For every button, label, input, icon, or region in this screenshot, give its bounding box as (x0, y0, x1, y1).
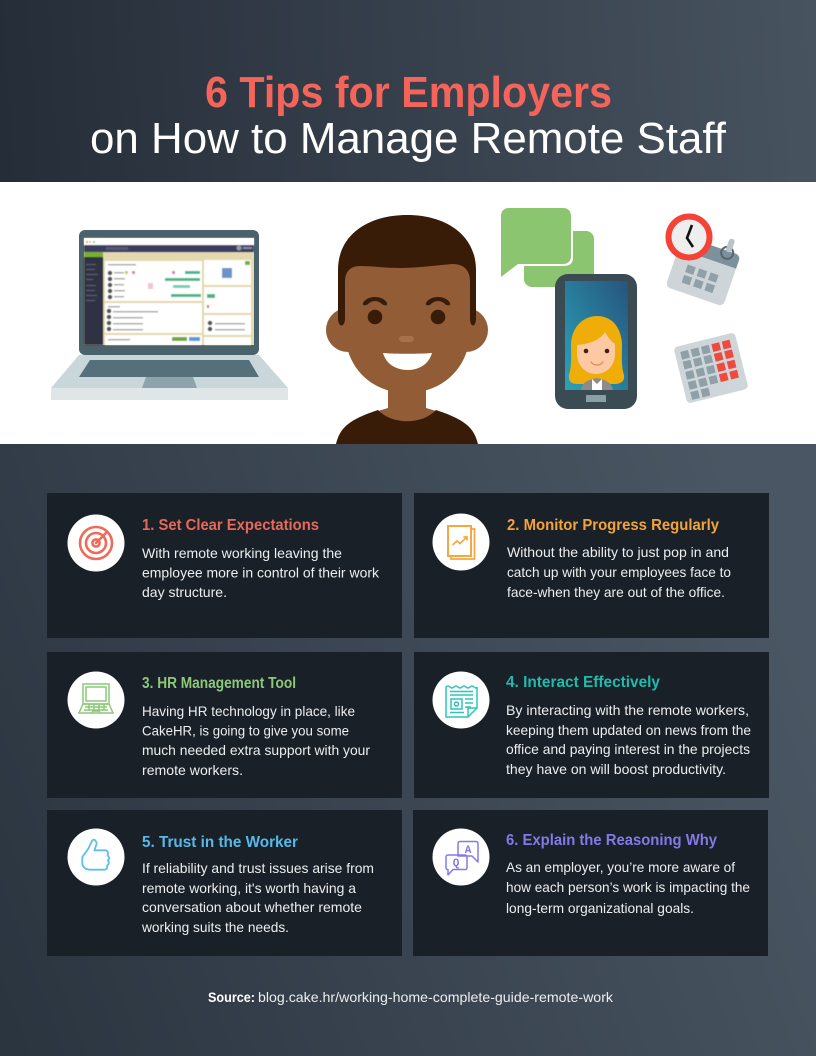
icon: question and answer bubbles: A (465, 845, 472, 857)
icon: calendar with clock (665, 216, 745, 306)
icon: thumbs up (68, 828, 124, 886)
icon: laptop outline (68, 672, 124, 728)
text: tip 4 body: office and paying interest in the projects (506, 741, 750, 757)
icon: newspaper (432, 672, 490, 728)
text: tip 5 body: working suits the needs. (141, 919, 289, 935)
source line: blog.cake.hr/working-home-complete-guide-remote-work (258, 989, 614, 1005)
text: tip 4 body: By interacting with the remote workers, (506, 702, 749, 718)
panel: tip 1 (47, 493, 402, 638)
text: tip 5 body (141, 860, 374, 935)
heading: tip 5: 5. Trust in the Worker (142, 834, 298, 851)
text: tip 5 body: If reliability and trust issues arise from (142, 860, 374, 876)
text: tip 2 body: Without the ability to just pop in and (507, 544, 729, 560)
icon: progress report (432, 514, 490, 570)
heading: tip 4: 4. Interact Effectively (506, 674, 660, 691)
text: tip 5 body: conversation about whether remote (142, 899, 362, 915)
text: tip 3 body: much needed extra support with your (142, 742, 370, 758)
icon: chat bubbles (499, 206, 594, 287)
text: tip 5 body: remote working, it's worth having a (142, 880, 356, 896)
text: tip 1 body: With remote working leaving the (142, 545, 342, 561)
panel: tip 4 (414, 652, 769, 798)
text: tip 2 body (507, 544, 731, 600)
text: tip 6 body: long-term organizational goals. (506, 900, 694, 916)
panel: tip 6 (413, 810, 768, 956)
icon: monthly calendar (673, 332, 749, 404)
title (90, 68, 727, 163)
heading: tip 1: 1. Set Clear Expectations (142, 517, 319, 534)
icon: question and answer bubbles: Q (453, 858, 460, 870)
icon: phone with video call (555, 274, 637, 409)
heading: tip 2: 2. Monitor Progress Regularly (507, 517, 719, 534)
heading: tip 6: 6. Explain the Reasoning Why (506, 832, 717, 849)
heading: tip 3: 3. HR Management Tool (142, 675, 296, 692)
text: tip 6 body: how each person’s work is impacting the (506, 879, 750, 895)
text: tip 1 body: employee more in control of their work (142, 564, 380, 580)
text: tip 3 body: remote workers. (142, 762, 243, 778)
icon: smiling man (326, 215, 488, 444)
illustration band (0, 182, 816, 444)
source line: Source: (208, 989, 255, 1005)
text: tip 1 body (142, 545, 380, 600)
icon: target (68, 514, 124, 572)
text: tip 3 body (142, 703, 370, 778)
panel: tip 3 (47, 652, 402, 798)
icon: laptop with HR dashboard (51, 230, 288, 400)
text: tip 3 body: Having HR technology in place, like (142, 703, 355, 719)
icon: question and answer bubbles (432, 828, 490, 886)
text: tip 6 body: As an employer, you’re more aware of (506, 859, 735, 875)
title: on How to Manage Remote Staff (90, 114, 727, 163)
text: tip 4 body: keeping them updated on news from the (506, 722, 751, 738)
text: tip 2 body: face-when they are out of the office. (507, 584, 725, 600)
title: 6 Tips for Employers (205, 68, 612, 117)
panel: tip 2 (414, 493, 769, 638)
panel: tip 5 (47, 810, 402, 956)
text: tip 4 body (506, 702, 751, 777)
text: tip 1 body: day structure. (142, 584, 227, 600)
text: tip 2 body: catch up with your employees face to (507, 564, 731, 580)
text: tip 6 body (506, 859, 750, 916)
text: tip 4 body: they have on will boost productivity. (506, 761, 726, 777)
text: tip 3 body: CakeHR, is going to give you some (142, 722, 349, 738)
